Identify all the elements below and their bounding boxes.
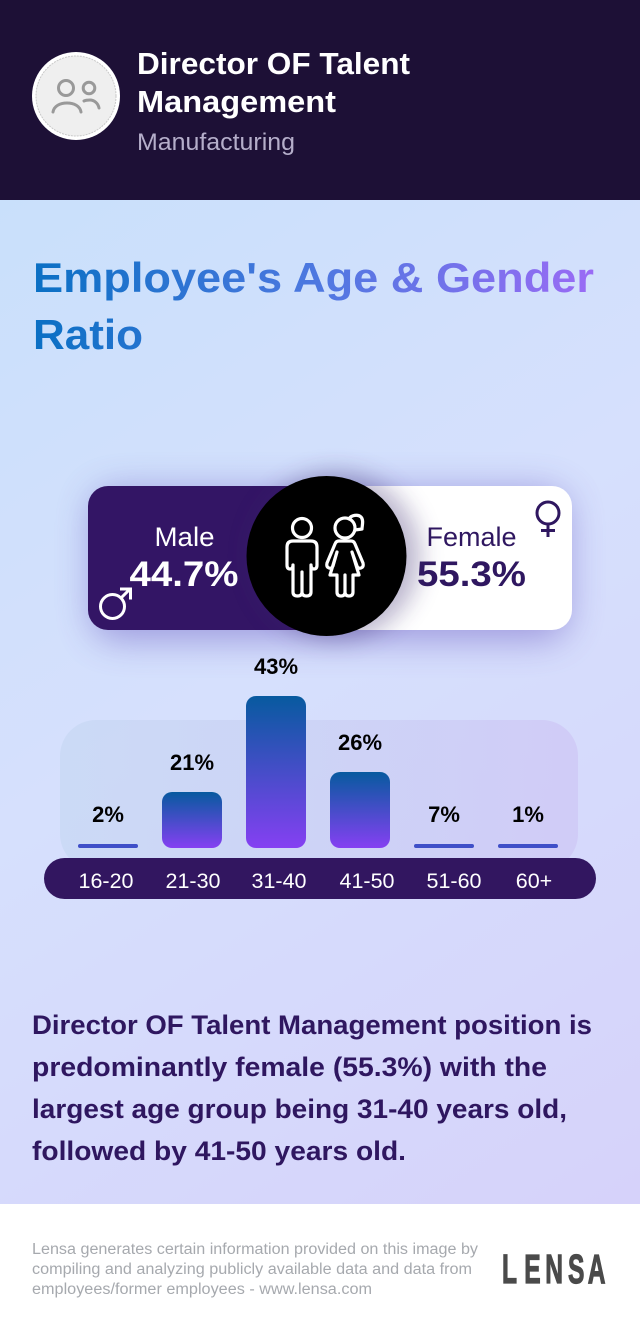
- age axis: 60+: [516, 869, 552, 893]
- job title: [137, 46, 410, 119]
- background: [0, 200, 640, 1204]
- disclaimer: employees/former employees - www.lensa.com: [32, 1281, 372, 1298]
- icon: female symbol: [537, 502, 559, 537]
- avatar icon: [32, 52, 120, 140]
- age axis: 16-20: [78, 869, 134, 893]
- heading: [33, 254, 594, 358]
- summary text: largest age group being 31-40 years old,: [32, 1094, 567, 1124]
- male percent: 44.7%: [130, 555, 238, 594]
- summary text: predominantly female (55.3%) with the: [32, 1052, 547, 1082]
- disclaimer: [32, 1241, 478, 1298]
- bars: [78, 696, 558, 848]
- male label: Male: [154, 522, 214, 552]
- chart panel: [60, 720, 578, 870]
- black circle with people icon: [246, 472, 420, 640]
- summary text: followed by 41-50 years old.: [32, 1136, 406, 1166]
- bar values: 21%: [170, 750, 214, 775]
- header band: [0, 0, 640, 200]
- female label: Female: [426, 522, 516, 552]
- icon: male symbol: [100, 589, 130, 618]
- female panel: [240, 486, 572, 630]
- summary text: Director OF Talent Management position is: [32, 1010, 592, 1040]
- age axis: 41-50: [340, 869, 395, 893]
- bar values: 1%: [512, 802, 544, 827]
- disclaimer: Lensa generates certain information provided on this image by: [32, 1241, 478, 1258]
- job title: Management: [137, 84, 336, 119]
- industry: Manufacturing: [137, 129, 295, 156]
- age axis: 21-30: [166, 869, 221, 893]
- age axis: [44, 858, 596, 899]
- male panel: [88, 486, 320, 630]
- female percent: 55.3%: [417, 555, 526, 594]
- bar values: 2%: [92, 802, 124, 827]
- gender ratio card: [88, 472, 572, 640]
- footer: [0, 1204, 640, 1332]
- bar values: 7%: [428, 802, 460, 827]
- icon: boy and girl: [287, 515, 363, 596]
- age axis: 31-40: [252, 869, 307, 893]
- bar values: 26%: [338, 730, 382, 755]
- age axis: 51-60: [426, 869, 482, 893]
- heading: Ratio: [33, 311, 143, 358]
- logo: LENSA: [502, 1247, 606, 1293]
- job title: Director OF Talent: [137, 46, 410, 81]
- bar values: 43%: [254, 654, 298, 679]
- disclaimer: compiling and analyzing publicly available data and data from: [32, 1261, 472, 1278]
- heading: Employee's Age & Gender: [33, 254, 594, 301]
- age bar chart: [44, 654, 596, 899]
- bar values: [92, 654, 544, 827]
- summary text: [32, 1010, 592, 1166]
